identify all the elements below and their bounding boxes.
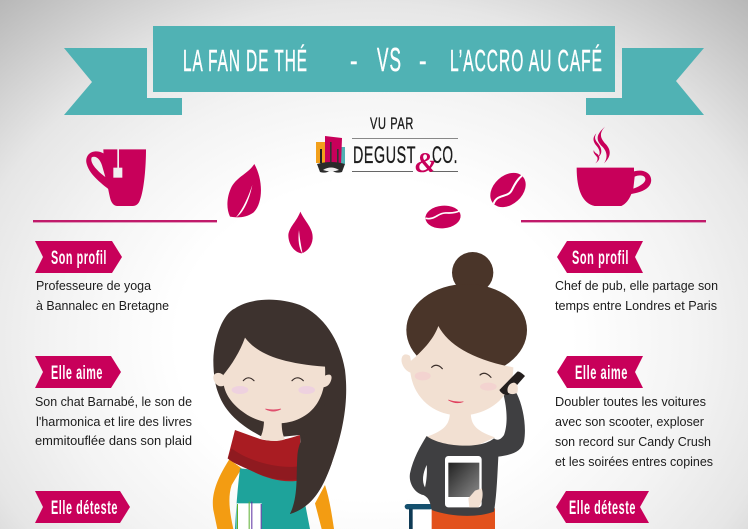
- orange cardigan: [213, 459, 334, 529]
- neck and chest: [425, 410, 495, 453]
- left column: tea fan: [35, 241, 192, 523]
- tablet: [445, 456, 482, 507]
- vu par label: VU PAR: [370, 114, 414, 133]
- icon: coffee bean flat: [424, 204, 462, 230]
- cheeks: [232, 386, 248, 394]
- mouth: [265, 409, 281, 411]
- tag: elle aime: Elle aime: [575, 363, 628, 384]
- icon: coffee cup with steam: [577, 127, 651, 206]
- brand suffix: CO.: [432, 142, 458, 169]
- stool: [405, 504, 433, 529]
- back hair: [213, 300, 346, 514]
- title banner: [64, 26, 704, 115]
- tag: elle déteste: Elle déteste: [569, 498, 636, 519]
- text: profil: Professeure de yoga: [36, 278, 152, 293]
- hand on phone: [507, 383, 518, 394]
- text: profil: à Bannalec en Bretagne: [36, 298, 169, 313]
- text: elle aime: son record sur Candy Crush: [555, 434, 711, 449]
- neck: [260, 420, 285, 441]
- text: elle aime: emmitouflée dans son plaid: [35, 433, 192, 448]
- scarf: [228, 430, 302, 481]
- dash: -: [350, 43, 359, 78]
- face: [223, 338, 325, 423]
- text: elle aime: et les soirées entres copines: [555, 454, 713, 469]
- character: coffee addict: [401, 252, 527, 529]
- left ribbon tail: [64, 48, 182, 115]
- books: [237, 502, 262, 529]
- ampersand: &: [415, 148, 437, 179]
- tag: elle déteste: [556, 491, 649, 523]
- icon: coffee bean tilted: [484, 166, 532, 214]
- right ribbon tail: [586, 48, 704, 115]
- tag: elle déteste: Elle déteste: [51, 498, 118, 519]
- hair lock over scarf: [290, 383, 340, 514]
- dash: -: [419, 43, 428, 78]
- text: elle aime: [35, 394, 192, 448]
- hand on tablet: [468, 488, 483, 507]
- icon: tea leaf small: [288, 212, 313, 254]
- mouth: [448, 400, 463, 403]
- logo: vu par degust and co: [316, 114, 458, 179]
- tag: elle déteste: [35, 491, 130, 523]
- text: elle aime: Son chat Barnabé, le son de: [35, 394, 192, 409]
- ear: [401, 354, 413, 373]
- tag: son profil: [557, 241, 643, 273]
- tag: elle aime: Elle aime: [51, 363, 103, 384]
- tag: elle aime: [35, 356, 121, 388]
- face: [410, 326, 513, 416]
- heading: vs: VS: [377, 41, 402, 78]
- text: profil: [555, 278, 718, 313]
- bun: [452, 252, 493, 293]
- tag: son profil: Son profil: [572, 248, 629, 269]
- text: elle aime: l'harmonica et lire des livres: [36, 414, 192, 429]
- phone: [499, 372, 525, 395]
- icon: tea leaf large: [227, 164, 261, 217]
- brand name: DEGUST: [353, 142, 416, 169]
- ears: [213, 373, 332, 387]
- hair: [406, 284, 527, 376]
- text: profil: [36, 278, 169, 313]
- banner panel: [153, 26, 615, 92]
- text: profil: temps entre Londres et Paris: [555, 298, 717, 313]
- text: elle aime: [555, 394, 713, 469]
- title banner: LA FAN DE THÉ: [183, 43, 308, 78]
- sweater: [410, 392, 525, 516]
- right column: coffee addict: [555, 241, 718, 523]
- text: profil: Chef de pub, elle partage son: [555, 278, 718, 293]
- text: elle aime: avec son scooter, exploser: [555, 414, 705, 429]
- divider: right: [521, 220, 706, 222]
- teal top: [235, 468, 310, 529]
- cheeks: [415, 372, 431, 380]
- tag: son profil: Son profil: [51, 248, 107, 269]
- heading: l'accro au café: L’ACCRO AU CAFÉ: [450, 43, 603, 78]
- character: tea fan: [213, 300, 346, 529]
- text: elle aime: Doubler toutes les voitures: [555, 394, 706, 409]
- eyes: [432, 365, 491, 377]
- icon: tea mug: [86, 149, 146, 206]
- tag: elle aime: [557, 356, 643, 388]
- eyes: [243, 378, 303, 381]
- orange skirt: [432, 508, 495, 529]
- tag: son profil: [35, 241, 122, 273]
- logo icon: [316, 136, 345, 173]
- divider: left: [33, 220, 217, 222]
